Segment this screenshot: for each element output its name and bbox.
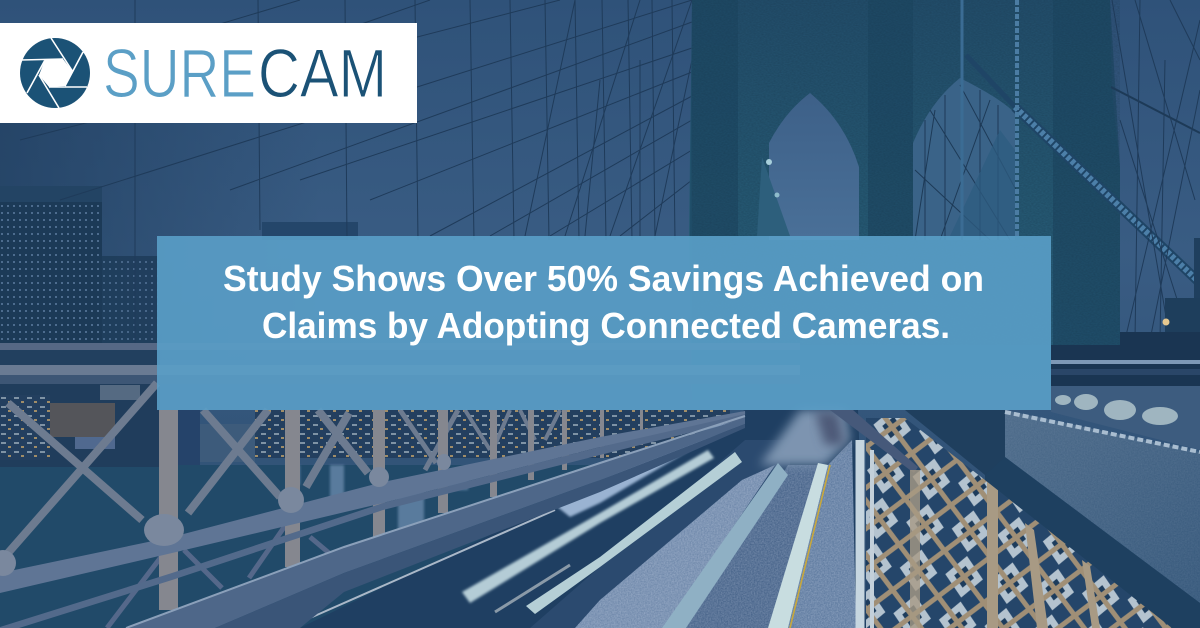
water <box>0 465 740 628</box>
right arch opening <box>913 78 1015 240</box>
diagonal steel beam <box>830 410 918 473</box>
headline <box>223 258 984 346</box>
wordmark: SURE <box>103 35 256 112</box>
right walkway and snow <box>1051 345 1200 450</box>
deck barrier <box>126 418 745 628</box>
vertical posts <box>159 410 643 610</box>
road surface <box>300 410 866 628</box>
headlight streak 4 <box>768 463 828 628</box>
distant glow <box>760 410 850 465</box>
left bridge truss <box>0 343 800 628</box>
mid lane B <box>686 465 818 628</box>
headline: Study Shows Over 50% Savings Achieved on <box>223 258 984 299</box>
light lane A <box>575 465 775 628</box>
distant buildings right <box>1120 238 1200 346</box>
logo panel <box>0 23 417 123</box>
diagonal lower rail <box>0 414 745 628</box>
wordmark: CAM <box>258 35 387 112</box>
motion blur light streak <box>555 412 745 517</box>
headlight streak 2 <box>526 452 742 614</box>
cable net left <box>20 0 692 345</box>
bridge tower <box>689 0 1120 400</box>
left arch opening <box>769 93 859 240</box>
cable net right <box>1112 0 1200 340</box>
wordmark <box>103 35 387 112</box>
right lattice truss <box>830 410 1172 628</box>
headlight streak 3 <box>662 463 788 628</box>
tan posts <box>910 470 1100 628</box>
headlight streak 1 <box>462 450 714 603</box>
text banner <box>157 236 1051 410</box>
icon: camera aperture <box>20 38 90 108</box>
city lights on shore <box>0 383 730 530</box>
city skyline left <box>0 186 358 410</box>
right stone wall <box>905 410 1200 628</box>
rivet plates <box>0 454 451 576</box>
right lane C <box>788 440 856 628</box>
cross braces <box>8 383 560 628</box>
upper horizontal beams <box>0 343 800 384</box>
headline: Claims by Adopting Connected Cameras. <box>262 305 950 346</box>
diagonal top rail <box>0 411 745 593</box>
main suspension cable <box>962 0 1200 283</box>
road edge marking <box>310 510 555 618</box>
